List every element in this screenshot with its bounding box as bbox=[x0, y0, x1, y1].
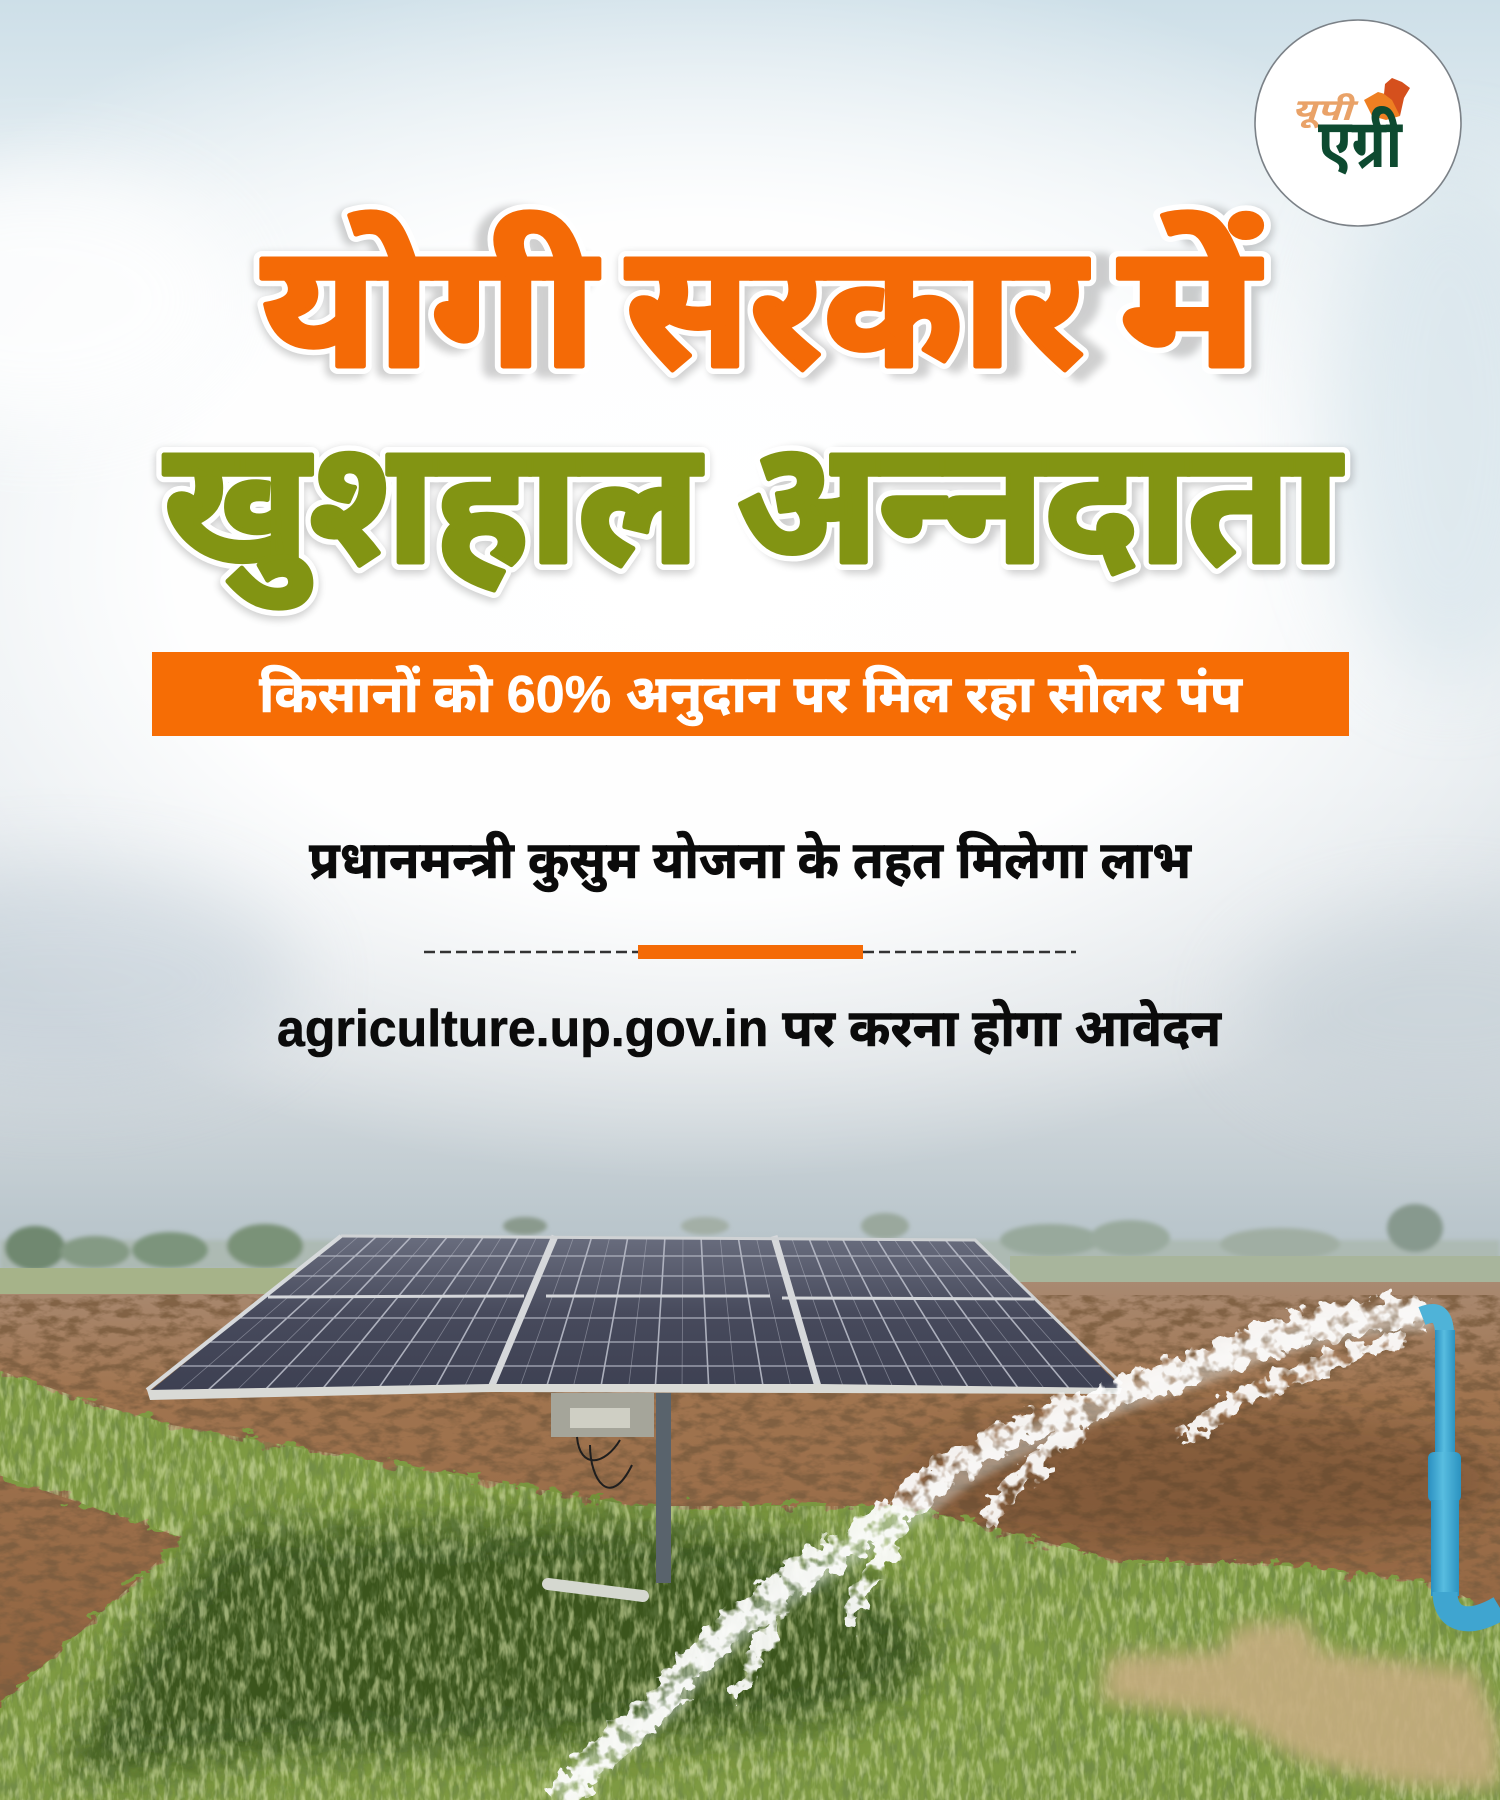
background: sky bbox=[0, 0, 1500, 1290]
title line 1: योगी bbox=[262, 211, 600, 403]
title line 1: में bbox=[1119, 211, 1262, 403]
title line 2: अन्‍नदाता bbox=[736, 407, 1343, 599]
solar panel array bbox=[146, 1234, 1122, 1400]
solar pump controller box bbox=[551, 1393, 654, 1488]
logo main word: एग्री bbox=[1318, 106, 1404, 182]
title line 2: खुशहाल bbox=[164, 407, 703, 608]
title line 2: अन्‍नदाता bbox=[736, 407, 1343, 599]
panel shadow on grass bbox=[60, 1520, 945, 1780]
background: ground and soil bbox=[0, 1256, 1500, 1800]
title line 2: खुशहाल अन्‍नदाता bbox=[164, 410, 1345, 611]
subtitle banner bbox=[152, 652, 1349, 736]
title line 1: योगी सरकार में bbox=[262, 214, 1265, 406]
white pipe on ground bbox=[548, 1584, 643, 1596]
logo small word: यूपी bbox=[1292, 93, 1359, 129]
title line 1: सरकार bbox=[626, 211, 1089, 403]
grass field bbox=[0, 1340, 1500, 1800]
title line 1: योगी bbox=[262, 211, 600, 403]
logo map icon bbox=[1364, 78, 1410, 120]
scheme text: प्रधानमन्त्री कुसुम योजना के तहत मिलेगा लाभ bbox=[309, 831, 1192, 893]
title line 1: सरकार bbox=[626, 211, 1089, 403]
bare earth patch bbox=[1100, 1620, 1500, 1790]
logo badge bbox=[1255, 20, 1461, 226]
background: tree line bbox=[0, 1204, 1500, 1270]
water jet bbox=[566, 1311, 1421, 1790]
solar pump support pole bbox=[656, 1393, 671, 1583]
blue irrigation pipe bbox=[1422, 1314, 1500, 1619]
divider bbox=[424, 945, 1076, 959]
title line 1: में bbox=[1119, 211, 1262, 403]
application text: agriculture.up.gov.in पर करना होगा आवेदन bbox=[277, 999, 1222, 1058]
title line 2: खुशहाल bbox=[164, 407, 703, 608]
subtitle banner: किसानों को 60% अनुदान पर मिल रहा सोलर पंप bbox=[259, 665, 1243, 727]
